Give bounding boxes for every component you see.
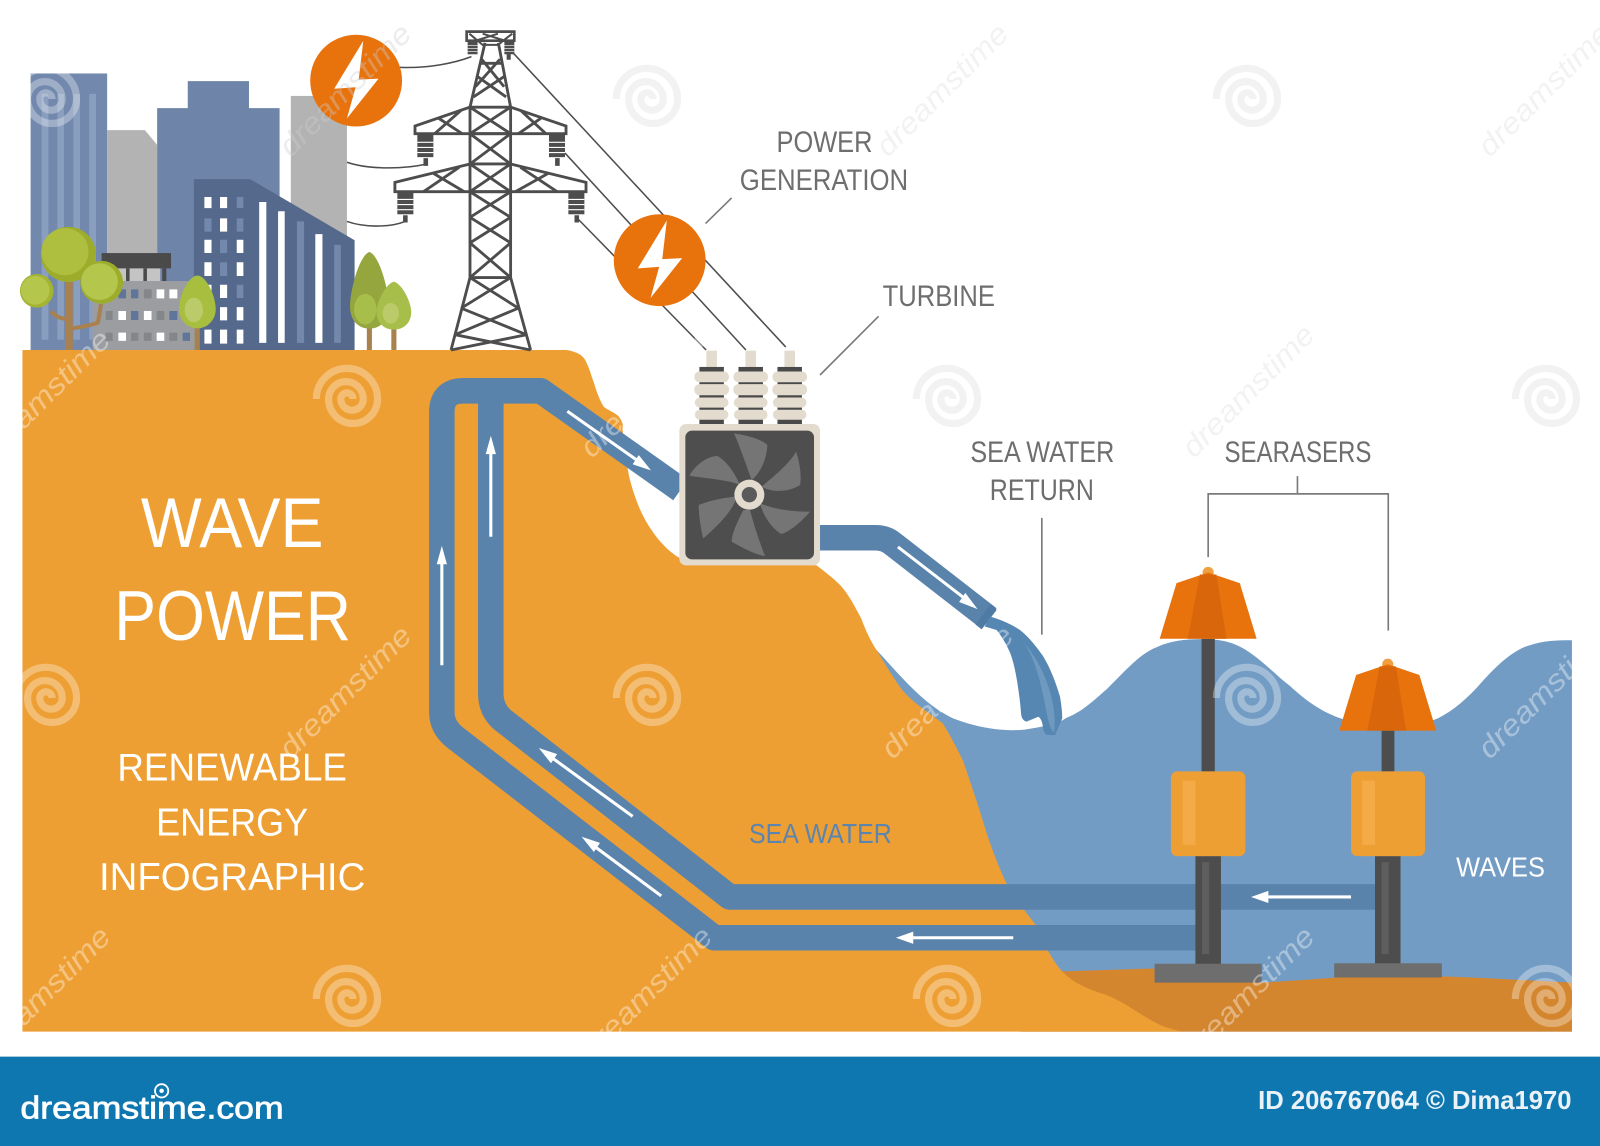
heading: wave power: WAVE — [141, 483, 323, 562]
turbine hub — [734, 480, 764, 510]
watermark text: dreamstime — [272, 17, 418, 163]
icon: power bolt, generation — [614, 214, 706, 306]
heading: wave power — [114, 483, 351, 655]
arrow: inner pipe up — [486, 436, 496, 537]
water outflow — [985, 616, 1062, 735]
label: power generation — [740, 126, 908, 197]
watermark text on white: dreamstime — [869, 17, 1015, 163]
watermark text: dreamstime — [874, 619, 1020, 765]
turbine bushings — [694, 351, 807, 424]
building: grey block — [107, 130, 157, 350]
turbine casing — [679, 424, 820, 565]
searaser: right — [1334, 659, 1442, 978]
tree: big left tree — [20, 227, 123, 350]
building: dark blue office — [194, 179, 355, 350]
label: turbine: TURBINE — [883, 280, 995, 313]
label: sea water return — [970, 436, 1114, 507]
icon: power bolt, city side — [310, 35, 402, 127]
power lines — [347, 53, 786, 350]
subheading: renewable energy infographic — [99, 747, 365, 899]
label: sea water return: RETURN — [990, 474, 1094, 507]
subheading: renewable energy infographic: INFOGRAPHIC — [99, 856, 365, 899]
turbine — [679, 351, 820, 565]
watermark text on white — [869, 17, 1600, 464]
arrow: outer pipe up — [437, 546, 447, 665]
arrow: upper diagonal — [539, 748, 633, 816]
building: stepped blue block — [157, 81, 280, 350]
buildings — [31, 73, 355, 350]
pylon insulators — [397, 41, 584, 222]
watermark text on white: dreamstime — [1175, 318, 1321, 464]
building: grey tower — [291, 96, 347, 350]
arrow: to turbine — [567, 411, 651, 470]
pipe: upper sea water pipe — [491, 392, 1378, 897]
trees — [20, 227, 411, 350]
searaser: left — [1155, 567, 1262, 983]
building: tall blue tower — [31, 73, 107, 350]
footer logo: dreamstime.com — [20, 1089, 284, 1125]
panel: ground cross-section — [22, 350, 1183, 1032]
label: power generation: GENERATION — [740, 164, 908, 197]
arrow: lower horizontal — [896, 932, 1013, 944]
subheading: renewable energy infographic: ENERGY — [156, 802, 308, 845]
panel: sea water — [877, 639, 1572, 1032]
watermark text: dreamstime — [272, 619, 418, 765]
pipe collar — [976, 604, 997, 629]
label: power generation: POWER — [777, 126, 872, 159]
turbine fan blades — [689, 433, 810, 556]
arrow: from turbine — [898, 547, 978, 609]
tree: right pair — [350, 252, 411, 350]
footer bar — [0, 1057, 1600, 1146]
label: waves: WAVES — [1456, 852, 1545, 883]
footer credit: ID 206767064 © Dima1970 — [1258, 1087, 1571, 1115]
pipe: return pipe — [816, 538, 989, 618]
arrow: upper horizontal — [1251, 891, 1351, 903]
watermark text: dreamstime — [573, 318, 719, 464]
pylon — [395, 32, 586, 350]
label: sea water return: SEA WATER — [970, 436, 1114, 469]
flow arrows — [437, 411, 1351, 944]
label: searasers: SEARASERS — [1224, 436, 1371, 469]
label: sea water: SEA WATER — [749, 818, 892, 849]
panel: sea bed — [1020, 968, 1572, 1032]
watermark text: dreamstime — [573, 920, 719, 1066]
subheading: renewable energy infographic: RENEWABLE — [117, 747, 347, 790]
arrow: lower diagonal — [582, 837, 661, 896]
tree: small middle tree — [179, 276, 216, 350]
building: small grey factory — [93, 253, 195, 350]
leader lines — [706, 198, 1388, 635]
pipe: lower sea water pipe — [442, 391, 1199, 938]
watermark text: dreamstime — [1175, 920, 1321, 1066]
heading: wave power: POWER — [114, 576, 351, 655]
